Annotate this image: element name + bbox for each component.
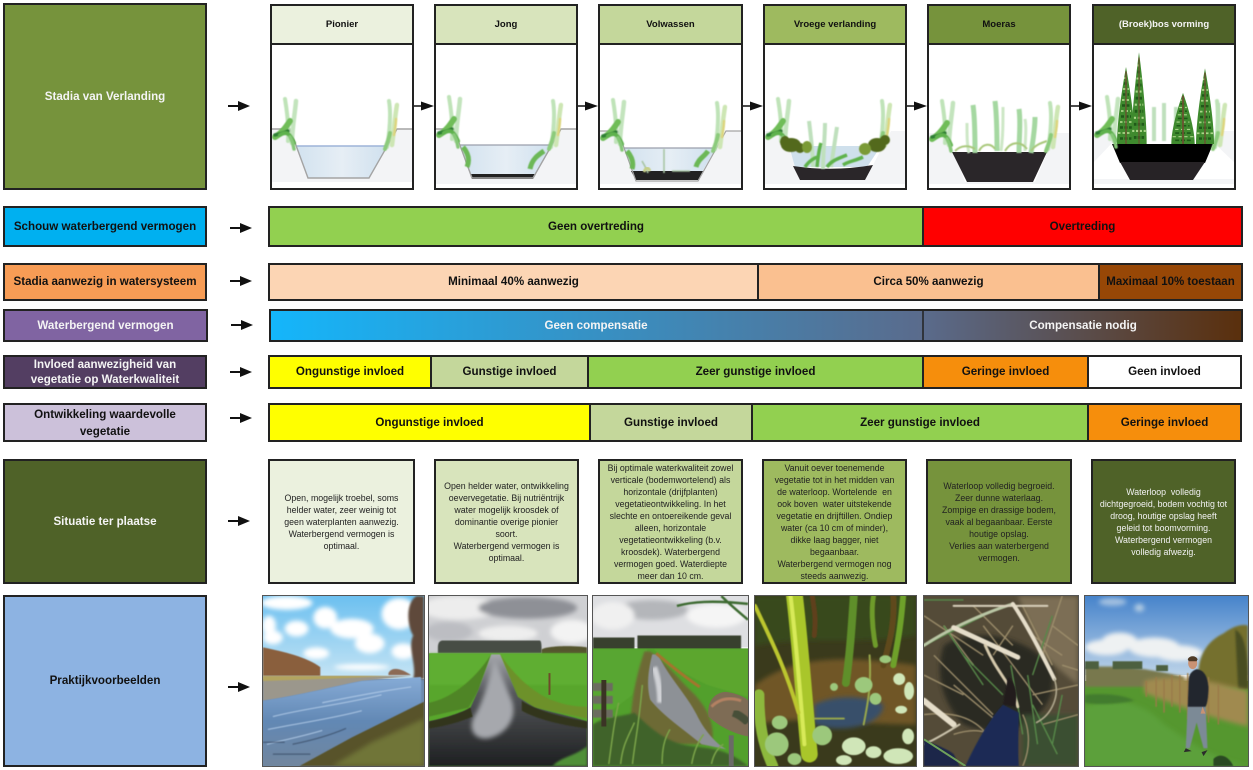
row: Ontwikkeling waardevolle vegetatie	[3, 403, 1242, 442]
bar: Maximaal 10% toestaan: Maximaal 10% toestaan	[1106, 276, 1235, 288]
bar: Geen invloed	[1087, 355, 1242, 389]
text block: (Broek)bos vorming	[1091, 459, 1236, 584]
text block: (Broek)bos vorming: Waterbergend vermogen	[1115, 534, 1212, 544]
row label: Waterbergend vermogen	[37, 318, 174, 332]
text block: Jong: dominantie overige pionier	[455, 516, 558, 526]
text block: Moeras: Verlies aan waterbergend	[949, 540, 1049, 550]
arrow: Volwassen to Vroege verlanding	[743, 102, 763, 110]
bar: Ongunstige invloed	[268, 403, 591, 442]
cross-section: Jong	[434, 45, 578, 190]
text block: Moeras: Zompige en drassige bodem,	[942, 504, 1056, 514]
row label: Praktijkvoorbeelden	[3, 595, 207, 767]
stage header: Vroege verlanding: Vroege verlanding	[794, 18, 876, 30]
text block: Vroege verlanding: de waterloop. Wortelende en	[777, 486, 892, 496]
text block: Volwassen: vermogen goed. Waterdiepte	[614, 558, 727, 568]
panel: Jong	[434, 4, 578, 190]
text block: Vroege verlanding: steeds aanwezig.	[800, 570, 868, 580]
stage header: (Broek)bos vorming	[1092, 4, 1236, 45]
bar: Geringe invloed: Geringe invloed	[1121, 416, 1208, 428]
stage header: Volwassen	[598, 4, 743, 45]
text block: Moeras: Waterloop volledig begroeid.	[943, 480, 1055, 490]
text block: Pionier: Open, mogelijk troebel, soms	[285, 492, 398, 502]
bar: Geen invloed: Geen invloed	[1128, 365, 1201, 378]
text block: Volwassen: meer dan 10 cm.	[637, 570, 704, 580]
text block: Vroege verlanding: Waterbergend vermogen nog	[777, 558, 892, 568]
photo: man in a meadow	[1084, 595, 1249, 767]
row label: Situatie ter plaatse: Situatie ter plaatse	[53, 514, 157, 528]
photo: open water with blue sky	[262, 595, 425, 767]
row label	[3, 309, 208, 342]
text block: (Broek)bos vorming: dichtgegroeid, bodem vochtig tot	[1100, 498, 1227, 508]
text block: Volwassen: Bij optimale waterkwaliteit zowel	[608, 462, 733, 472]
text block: Jong: Waterbergend vermogen is	[454, 540, 559, 550]
text block: Moeras: houtige opslag.	[969, 528, 1029, 538]
row label	[3, 355, 207, 389]
row label: vegetatie	[80, 424, 130, 438]
text block: Volwassen: vegetatieontwikkeling. In het	[615, 498, 726, 508]
text block: Pionier	[268, 459, 415, 584]
bar: Zeer gunstige invloed: Zeer gunstige invloed	[696, 365, 815, 378]
row: Stadia aanwezig in watersysteem	[3, 263, 1243, 301]
text block: Vroege verlanding	[762, 459, 907, 584]
panel: (Broek)bos vorming	[1092, 4, 1236, 190]
bar: Gunstige invloed	[589, 403, 753, 442]
text block: Vroege verlanding: vegetatie tot in het midden van	[775, 474, 894, 484]
row: Schouw waterbergend vermogen	[3, 206, 1243, 247]
arrow	[231, 320, 253, 330]
photo: overgrown ditch with culvert	[592, 595, 749, 767]
arrow: situatie	[228, 516, 250, 526]
panel: Volwassen	[598, 4, 743, 190]
row label	[3, 263, 207, 301]
text block: Pionier: Waterbergend vermogen is	[289, 528, 394, 538]
gradient bar	[269, 309, 1243, 342]
bar: Ongunstige invloed: Ongunstige invloed	[296, 365, 404, 378]
text block: Jong: soort.	[495, 528, 518, 538]
bar: Gunstige invloed: Gunstige invloed	[462, 365, 557, 378]
heading: Stadia van Verlanding	[3, 3, 207, 190]
row: Invloed op Waterkwaliteit	[3, 355, 1242, 389]
photo: marshy reeds and leg	[923, 595, 1079, 767]
text block: Volwassen: verticale (bodemwortelend) als	[611, 474, 730, 484]
stage header: Volwassen: Volwassen	[646, 18, 695, 30]
arrow: stadia	[228, 101, 250, 111]
arrow: praktijk	[228, 682, 250, 692]
stage header: Moeras: Moeras	[982, 18, 1016, 30]
text block: Jong: optimaal.	[489, 552, 524, 562]
arrow: Vroege verlanding to Moeras	[907, 102, 927, 110]
row label	[3, 403, 207, 442]
row label: Invloed aanwezigheid van	[34, 358, 176, 371]
arrow	[230, 413, 252, 423]
panel: Vroege verlanding	[763, 4, 907, 190]
stage header: Vroege verlanding	[763, 4, 907, 45]
stage header: Pionier	[270, 4, 414, 45]
text block: Vroege verlanding: begaanbaar.	[810, 546, 859, 556]
cross-section: Volwassen	[598, 45, 743, 190]
row label: Praktijkvoorbeelden: Praktijkvoorbeelden	[50, 674, 160, 687]
stage header: Jong: Jong	[495, 18, 517, 30]
text block: Vroege verlanding: dikke laag bagger, niet	[790, 534, 879, 544]
text block: Vroege verlanding: Vanuit oever toenemende	[784, 462, 885, 472]
arrow	[230, 367, 252, 377]
text block: Volwassen: kroosdek). Waterbergend	[621, 546, 720, 556]
bar: Geen overtreding	[268, 206, 924, 247]
panel: Moeras	[927, 4, 1071, 190]
text block: Volwassen	[598, 459, 743, 584]
row label: vegetatie op Waterkwaliteit	[31, 373, 179, 386]
arrow	[230, 276, 252, 286]
stage header: Jong	[434, 4, 578, 45]
text block: Volwassen: vegetatieontwikkeling (b.v.	[619, 534, 722, 544]
bar: Geen overtreding: Geen overtreding	[548, 220, 644, 232]
text block: (Broek)bos vorming: droog, houtige opslag heeft	[1110, 510, 1217, 520]
text block: Jong: water mogelijk kroosdek of	[454, 504, 559, 514]
photo: ditch with green meadow	[428, 595, 588, 767]
bar: Geringe invloed	[1087, 403, 1242, 442]
cross-section: Vroege verlanding	[763, 45, 907, 190]
bar: Gunstige invloed	[430, 355, 589, 389]
bar: Overtreding	[922, 206, 1243, 247]
bar: Ongunstige invloed	[268, 355, 432, 389]
text block: Jong: oevervegetatie. Bij nutriëntrijk	[449, 492, 564, 502]
row label: Ontwikkeling waardevolle	[34, 408, 176, 420]
stage header: Pionier: Pionier	[326, 18, 358, 30]
text block: Moeras: Zeer dunne waterlaag.	[955, 492, 1043, 502]
photo: reeds and leaves in shallow water	[754, 595, 917, 767]
text block: Pionier: geen waterplanten aanwezig.	[284, 516, 399, 526]
text block: Pionier: optimaal.	[324, 540, 359, 550]
text block: Moeras: vaak al begaanbaar. Eerste	[945, 516, 1053, 526]
cross-section: Moeras	[927, 45, 1071, 190]
text block: Moeras	[926, 459, 1072, 584]
text block: Volwassen: slechte en ontoereikende geval	[610, 510, 731, 520]
bar: Maximaal 10% toestaan	[1098, 263, 1243, 301]
bar: Minimaal 40% aanwezig	[268, 263, 759, 301]
text block: Volwassen: alleen, horizontale	[635, 522, 706, 532]
bar: Ongunstige invloed: Ongunstige invloed	[375, 416, 484, 428]
bar label: Compensatie nodig: Compensatie nodig	[1029, 319, 1137, 332]
text block: (Broek)bos vorming: volledig afwezig.	[1131, 546, 1196, 556]
text block: Vroege verlanding: ook boven water uitstekende	[777, 498, 892, 508]
bar: Overtreding: Overtreding	[1050, 220, 1115, 232]
text block: Jong	[434, 459, 579, 584]
bar label: Geen compensatie: Geen compensatie	[544, 319, 648, 332]
bar: Geringe invloed	[922, 355, 1089, 389]
row label	[3, 206, 207, 247]
arrow: Pionier to Jong	[414, 102, 434, 110]
arrow: Jong to Volwassen	[578, 102, 598, 110]
stage header: Moeras	[927, 4, 1071, 45]
cross-section: Pionier	[270, 45, 414, 190]
text block: Volwassen: horizontale (drijfplanten)	[623, 486, 718, 496]
bar: Zeer gunstige invloed: Zeer gunstige invloed	[860, 416, 980, 428]
panel: Pionier	[270, 4, 414, 190]
bar: Minimaal 40% aanwezig: Minimaal 40% aanwezig	[448, 275, 579, 288]
text block: Moeras: vermogen.	[978, 552, 1020, 562]
arrow	[230, 223, 252, 233]
bar: Zeer gunstige invloed	[751, 403, 1089, 442]
heading: Stadia van Verlanding: Stadia van Verlanding	[45, 90, 165, 102]
row label: Schouw waterbergend vermogen	[14, 220, 196, 232]
text block: Vroege verlanding: vegetatie en drijftillen. Ondiep	[777, 510, 892, 520]
cross-section: (Broek)bos vorming	[1092, 45, 1236, 190]
arrow: Moeras to (Broek)bos vorming	[1071, 102, 1092, 110]
text block: Jong: Open helder water, ontwikkeling	[444, 480, 569, 490]
row: Waterbergend vermogen	[3, 309, 1243, 342]
bar: Circa 50% aanwezig: Circa 50% aanwezig	[873, 275, 984, 288]
text block: (Broek)bos vorming: geleid tot boomvorming.	[1117, 522, 1210, 532]
row label: Situatie ter plaatse	[3, 459, 207, 584]
bar: Geringe invloed: Geringe invloed	[962, 365, 1049, 378]
row label: Stadia aanwezig in watersysteem	[14, 275, 196, 288]
bar: Zeer gunstige invloed	[587, 355, 924, 389]
stage header: (Broek)bos vorming: (Broek)bos vorming	[1119, 18, 1209, 30]
text block: Vroege verlanding: water (ca 10 cm of minder),	[781, 522, 888, 532]
bar: Gunstige invloed: Gunstige invloed	[624, 416, 718, 428]
text block: Pionier: helder water, zeer weinig tot	[287, 504, 396, 514]
text block: (Broek)bos vorming: Waterloop volledig	[1126, 486, 1201, 496]
bar: Circa 50% aanwezig	[757, 263, 1100, 301]
